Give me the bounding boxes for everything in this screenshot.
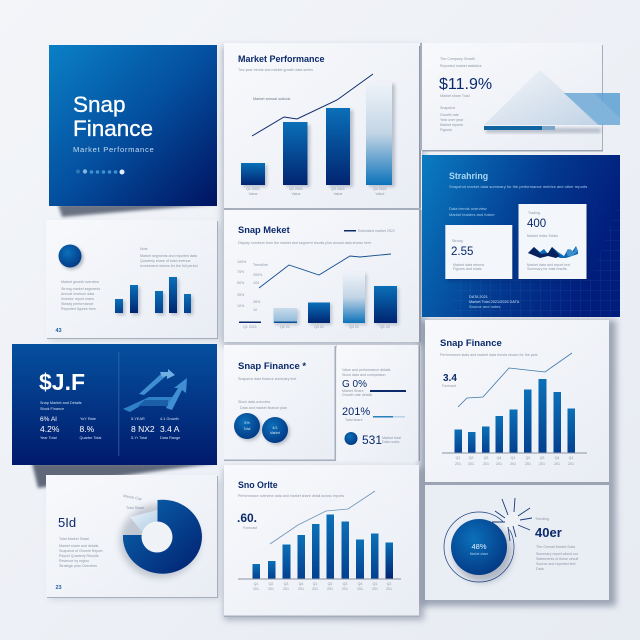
stats left: 8.% (80, 424, 95, 434)
metric circles: Total (244, 427, 251, 431)
panel: hero title (49, 45, 217, 206)
axis labels: Q1 (373, 582, 377, 586)
axis labels: Q2 (469, 456, 473, 460)
panel: market performance (224, 43, 422, 210)
panel: key figure (420, 43, 620, 152)
card: 2.55: Market data returns (453, 263, 484, 267)
axis labels: Q1 (569, 456, 573, 460)
trend line (270, 491, 375, 544)
glass triangle (484, 70, 620, 133)
text block: Source and reported text (536, 562, 576, 566)
axis labels: 201 (312, 587, 318, 591)
card: 2.55: Strong (452, 239, 463, 243)
trend line (252, 74, 373, 136)
stats right: 4-1 Growth (160, 417, 179, 421)
card: 2.55 (445, 225, 514, 281)
subtext: Performance overview data and market share detail across reports (238, 494, 344, 498)
subtext: Stock Finance (40, 407, 64, 411)
axis labels: Q1 (511, 456, 515, 460)
axis labels: Q2 (387, 582, 391, 586)
axis labels: Q3 (484, 456, 488, 460)
axis labels: Q4 (497, 456, 501, 460)
key number: 40er (535, 525, 562, 540)
axis labels: 201 (483, 462, 489, 466)
panel: sno orlte chart (224, 465, 419, 617)
text top (440, 57, 482, 68)
panel: snap finance circles: Data and market finance plan (240, 406, 287, 410)
panel: stats column: Stock data and comparison (342, 373, 386, 377)
footnote: DATA 2021 (469, 295, 488, 299)
axis labels: 201 (510, 462, 516, 466)
key number: .60. (237, 511, 257, 525)
text block: Strategic plan Overview (59, 564, 97, 568)
text lower: Figures (440, 128, 452, 132)
caption: Market Cap (123, 494, 142, 501)
axis labels: Value (292, 192, 300, 196)
stat 531: 531 (362, 433, 382, 447)
text lower: Snapshot (440, 106, 455, 110)
text block left: Investor report notes (61, 297, 94, 301)
axis labels: 201 (283, 587, 289, 591)
panel: market performance: Market annual outlook (253, 97, 290, 101)
y labels: 50% (237, 281, 245, 285)
text block: The Overall Market Data (536, 545, 575, 549)
axis labels (246, 187, 387, 196)
stat 531: Market total (382, 436, 401, 440)
stat G 0% (342, 379, 406, 397)
panel: snap finance bars (425, 320, 609, 482)
text block: Revenue by region (59, 559, 89, 563)
bar chart (252, 514, 393, 579)
text block: Total Market Share (59, 537, 89, 541)
subtext: Snapshot data finance summary text (238, 377, 296, 381)
bar chart (115, 277, 193, 315)
axis labels: Q1 (456, 456, 460, 460)
heading: Market Performance (238, 54, 325, 64)
stat 531 (344, 432, 401, 447)
heading: Strahring (449, 171, 488, 181)
card: 400: Trading (528, 211, 540, 215)
stats left (40, 416, 102, 440)
axis labels: Q2 (526, 456, 530, 460)
stat 201% (342, 406, 405, 422)
text block: Summary report about our (536, 552, 579, 556)
y labels: Trendline (253, 263, 268, 267)
page number: 23 (56, 585, 62, 591)
text block left: Market growth overview (61, 280, 99, 284)
heading: $J.F (39, 369, 85, 395)
subtext: Snapshot market data summary for the performance metrics and other reports (449, 184, 587, 189)
metric circles (234, 413, 290, 445)
card: 400 (518, 204, 588, 281)
subtext (40, 401, 82, 411)
axis labels: Q1 2021 (246, 187, 260, 191)
donut chart (120, 500, 202, 578)
stats left: Quarter Total (80, 436, 102, 440)
stats right (131, 417, 180, 440)
axis labels: 201 (342, 587, 348, 591)
axis labels: 201 (372, 587, 378, 591)
grid texture (450, 200, 620, 317)
text block: Market share and details (59, 544, 99, 548)
y labels: 26% (253, 300, 261, 304)
icon: zigzag wave (528, 246, 578, 258)
text block left (61, 280, 100, 311)
text block right: Note (140, 247, 148, 251)
text lower: Growth rate (440, 113, 459, 117)
icon: burst (492, 498, 532, 541)
axis labels: Value (376, 192, 384, 196)
key number: 3.4 (443, 373, 457, 384)
key number: $11.9% (439, 76, 492, 93)
y labels: 75% (237, 270, 245, 274)
divider (118, 352, 120, 456)
axis labels: 201 (268, 587, 274, 591)
panel: SJF blue (12, 344, 217, 465)
y labels (237, 260, 268, 312)
heading: Snap Finance: Snap (73, 92, 126, 117)
text top: Value and performance details (342, 368, 391, 372)
label: Trending (535, 517, 549, 521)
axis labels (253, 582, 392, 591)
stats right: 5-Yr Total (131, 436, 147, 440)
axis labels: 201 (468, 462, 474, 466)
text block right (140, 247, 198, 268)
stat G 0%: Market Share (342, 389, 364, 393)
text block left: Steady performance (61, 302, 93, 306)
axis labels: Value (334, 192, 342, 196)
circle gauge (444, 512, 514, 582)
stat G 0%: G 0% (342, 379, 367, 390)
note: Data trends overview (449, 206, 487, 211)
panel: strahring blue (422, 155, 620, 317)
card: 400: Market data and report text (527, 263, 570, 267)
axis labels: Value (249, 192, 257, 196)
axis labels: 201 (525, 462, 531, 466)
axis labels: 201 (386, 587, 392, 591)
panel: snap finance bars: Forecast (442, 384, 456, 388)
text block right: Investment returns for the full period (140, 264, 198, 268)
footnote: Source and notes (469, 304, 500, 309)
axis labels: 201 (357, 587, 363, 591)
axis labels: 201 (298, 587, 304, 591)
card: 2.55: 2.55 (451, 246, 473, 258)
trend line (458, 353, 572, 407)
text block (59, 537, 103, 568)
y labels: 25% (237, 293, 245, 297)
heading: Snap Meket (238, 225, 290, 235)
axis labels: Q2 21 (280, 325, 290, 329)
y labels: 100 (253, 281, 259, 285)
stats right: 3.4 A (160, 424, 180, 434)
axis labels (243, 325, 390, 329)
text block: Data (536, 567, 544, 571)
text block: Statements of these circuit (536, 557, 578, 561)
legend: Estimated market 2021 (358, 229, 395, 233)
axis labels: Q3 21 (314, 325, 324, 329)
subtext: Two year trends and market growth data series (238, 68, 313, 72)
panel: circle metric (425, 485, 609, 600)
text top: Reported market statistics (440, 64, 482, 68)
card: 400: Market index Totals (527, 234, 558, 238)
axis labels (455, 456, 574, 466)
stat G 0%: Growth rate details (342, 393, 372, 397)
stats right: Data Range (160, 436, 180, 440)
heading: Snap Finance * (238, 361, 306, 372)
circle gauge: 48% (471, 542, 487, 551)
axis labels: Q4 21 (349, 325, 359, 329)
text top: The Company Growth (440, 57, 475, 61)
axis labels: 201 (496, 462, 502, 466)
stat 531: Data notes (382, 440, 400, 444)
text block left: Reported figures here (61, 307, 96, 311)
icon: rising arrows (123, 369, 187, 412)
text lower: Market reports (440, 123, 463, 127)
axis labels: Q2 (328, 582, 332, 586)
text block left: Annual revenue data (61, 292, 94, 296)
axis labels: Q3 (540, 456, 544, 460)
axis labels: Q3 2021 (331, 187, 345, 191)
panel: hero title: Finance (73, 116, 153, 141)
heading: Snap Finance (440, 338, 502, 349)
card: 400: Summary for total results (527, 267, 567, 271)
stats left: Year Total (40, 436, 57, 440)
panel: small bars (46, 220, 218, 339)
metric circles: 4/1 (272, 426, 278, 430)
subtext: Display numbers from the market and segment results plus annual data shown here (238, 241, 371, 245)
stats right: 8 NX2 (131, 424, 155, 434)
y labels: 10 (253, 308, 257, 312)
big label: 5Id (58, 515, 76, 530)
text block right: Market segments and reported data (140, 254, 197, 258)
panel: donut (46, 475, 218, 598)
axis labels: Q4 (555, 456, 559, 460)
axis labels: Q4 (358, 582, 362, 586)
panel: sno orlte chart: Forecast (243, 526, 257, 530)
panel: snap market (224, 210, 421, 342)
page number: 43 (56, 328, 62, 334)
caption: Market share Total (440, 94, 470, 98)
stats left: 4.2% (40, 424, 60, 434)
axis labels: 201 (554, 462, 560, 466)
axis labels: Q4 2021 (373, 187, 387, 191)
subtext: Performance stats and market data trends shown for the year (440, 353, 538, 357)
text block: Snapshot of Growth Report (59, 549, 103, 553)
y labels: 10% (237, 304, 245, 308)
axis labels: 201 (253, 587, 259, 591)
panel: snap finance circles (224, 345, 336, 461)
bar chart (239, 272, 399, 325)
stat 201%: Total share (345, 418, 363, 422)
stats left: YoY Rate (80, 417, 96, 421)
text lower (440, 106, 464, 132)
text lower: Year over year (440, 118, 464, 122)
panel: snap finance circles: Stock data overview (238, 400, 271, 404)
text block: Report Quarterly Results (59, 554, 99, 558)
trend line (259, 254, 391, 288)
axis labels: Q3 (343, 582, 347, 586)
y labels: 100% (237, 260, 247, 264)
axis labels: Q3 (284, 582, 288, 586)
axis labels: Q4 (299, 582, 303, 586)
stats left: 6% AI (40, 416, 57, 423)
axis labels: 201 (539, 462, 545, 466)
baseline (442, 452, 587, 454)
metric circles: Market (270, 431, 280, 435)
panel: stats column (337, 345, 421, 461)
bar chart (241, 82, 395, 187)
axis labels: 201 (568, 462, 574, 466)
bar chart (454, 379, 575, 453)
axis labels: 201 (455, 462, 461, 466)
axis labels: Q1 22 (380, 325, 390, 329)
caption: Total Share (126, 506, 144, 510)
axis labels: Q1 (254, 582, 258, 586)
stats right: 5-YEAR (131, 417, 145, 421)
axis labels: Q1 (313, 582, 317, 586)
stat 201%: 201% (342, 406, 370, 418)
circle gauge: Market share (470, 552, 489, 556)
axis labels: Q2 (269, 582, 273, 586)
footnote: Market Total 2021/2026 DATA (469, 300, 520, 304)
card: 2.55: Figures and totals (453, 267, 482, 271)
metric circles: 5% (244, 421, 250, 425)
caption (123, 494, 144, 510)
subtitle: Market Performance (73, 145, 154, 154)
heading: Sno Orlte (238, 480, 278, 490)
axis labels: 201 (327, 587, 333, 591)
y labels: 200% (253, 273, 263, 277)
note: Market leaders and future (449, 212, 495, 217)
baseline (238, 578, 401, 580)
subtext: Snap Market and Details (40, 401, 82, 405)
card: 400: 400 (527, 218, 546, 230)
text block (536, 545, 579, 571)
text block left: Strong market segments (61, 287, 100, 291)
axis labels: Q2 2021 (289, 187, 303, 191)
text block right: Quarterly share of total revenue (140, 259, 191, 263)
icon: blue ball (58, 244, 84, 270)
footnote (469, 295, 520, 309)
pagination dots (76, 169, 124, 174)
note (449, 206, 495, 217)
axis labels: Q1 2021 (243, 325, 257, 329)
